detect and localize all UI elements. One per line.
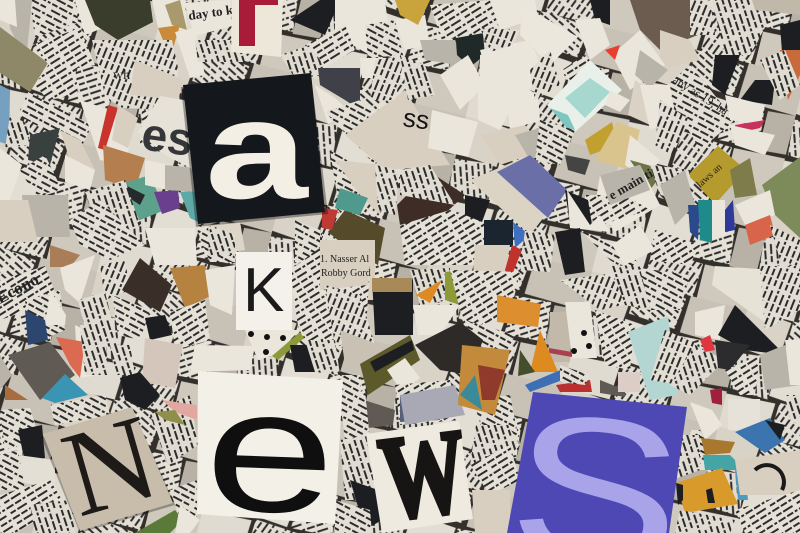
snippet words on scraps bbox=[0, 1, 732, 308]
snippet words on scraps: Robby Gord bbox=[321, 268, 371, 279]
red letter card bbox=[231, 0, 283, 57]
top-right scraps bbox=[400, 0, 800, 285]
snippet words on scraps: e main ti bbox=[606, 165, 656, 203]
top-centre scraps bbox=[175, 0, 530, 300]
snippet words on scraps: wh bbox=[113, 68, 130, 83]
lower-left scraps bbox=[0, 255, 255, 533]
lower-centre scraps bbox=[245, 240, 460, 533]
snippet words on scraps: laws an bbox=[695, 162, 725, 190]
snippet words on scraps: ss bbox=[401, 102, 431, 136]
scrap: letters es: es bbox=[139, 107, 197, 166]
snippet words on scraps: day to kic bbox=[187, 1, 243, 23]
lower-right scraps bbox=[400, 265, 800, 533]
snippet words on scraps: 1. Nasser Al bbox=[320, 254, 369, 265]
top-left scraps bbox=[0, 0, 245, 267]
white card: letter K bbox=[236, 252, 292, 330]
black card: letter a: a bbox=[205, 70, 310, 228]
black card: letter a bbox=[181, 70, 328, 228]
white card: letter K: K bbox=[243, 256, 284, 325]
snippet words on scraps: any as 19, ha bbox=[670, 73, 732, 118]
